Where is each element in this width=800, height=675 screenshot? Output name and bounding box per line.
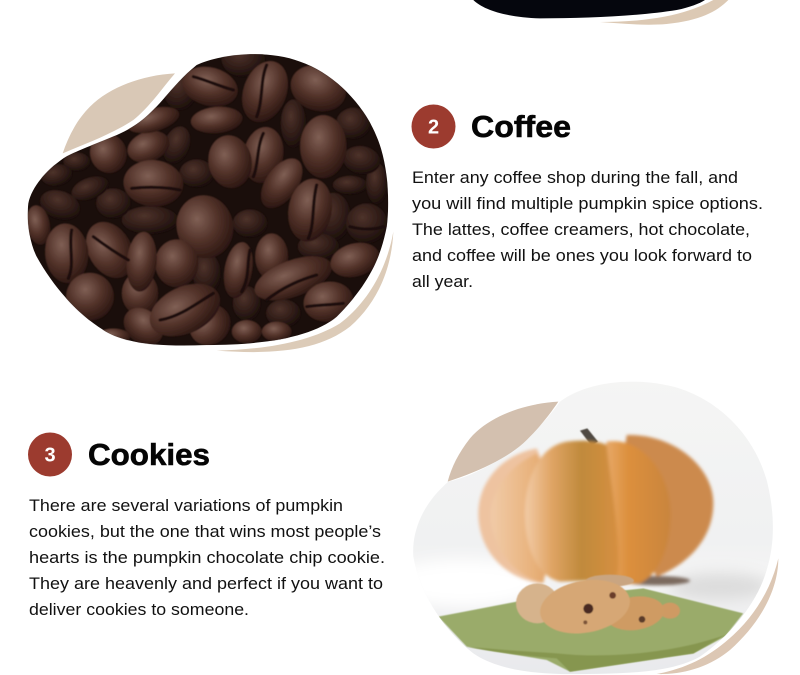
beige accent upper left	[63, 73, 175, 153]
coffee photo blob	[23, 43, 393, 354]
text block: cookies description: deliver cookies to someone.	[29, 600, 249, 619]
text block: coffee description: you will find multiple pumpkin spice options.	[412, 194, 763, 213]
text block: cookies description	[29, 496, 385, 619]
text block: cookies description: There are several variations of pumpkin	[29, 496, 343, 515]
text block: coffee description: The lattes, coffee creamers, hot chocolate,	[412, 220, 750, 239]
pumpkin and cookies photo blob	[387, 377, 780, 675]
pumpkin stem	[580, 428, 598, 446]
text block: coffee description	[412, 168, 763, 291]
heading: Coffee: Coffee	[471, 109, 571, 144]
pumpkin	[478, 435, 713, 585]
badge: number 2	[412, 104, 456, 148]
text block: cookies description: hearts is the pumpkin chocolate chip cookie.	[29, 548, 385, 567]
cookies	[516, 573, 680, 640]
text block: coffee description: all year.	[412, 272, 473, 291]
text block: coffee description: Enter any coffee shop during the fall, and	[412, 168, 738, 187]
badge: number 3	[28, 432, 72, 476]
soft table light and shadow	[417, 563, 764, 606]
badge: number 2: 2	[428, 116, 439, 138]
beige accent lower right	[657, 558, 778, 674]
badge: number 3: 3	[44, 444, 56, 466]
heading: Cookies: Cookies	[88, 437, 210, 472]
beige accent lower right	[217, 232, 393, 352]
text block: coffee description: and coffee will be ones you look forward to	[412, 246, 752, 265]
top image remnant: dark blob with beige accent	[473, 0, 728, 25]
beige accent upper left	[448, 402, 558, 482]
text block: cookies description: cookies, but the one that wins most people’s	[29, 522, 381, 541]
coffee beans photo	[23, 43, 393, 354]
photo scene	[413, 382, 773, 674]
green napkin	[438, 588, 743, 672]
text block: cookies description: They are heavenly and perfect if you want to	[29, 574, 383, 593]
